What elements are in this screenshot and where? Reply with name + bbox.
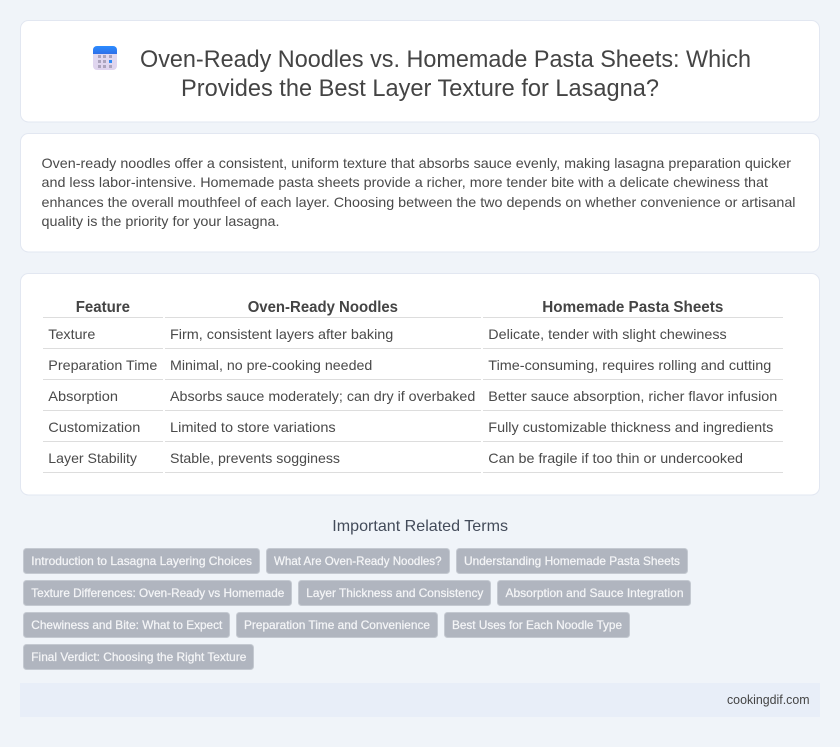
intro text block: Oven-ready noodles offer a consistent, uniform texture that absorbs sauce evenly, making lasagna preparation quicker: [42, 155, 791, 171]
row: texture: [48, 326, 727, 342]
intro text block: [42, 155, 796, 229]
tag: [236, 612, 438, 638]
table header row: Oven-Ready Noodles: [248, 299, 398, 316]
row: absorption: [48, 388, 777, 404]
row: absorption: Absorbs sauce moderately; can dry if overbaked: [170, 388, 475, 404]
footer bar: cookingdif.com: [727, 693, 810, 707]
tag: Preparation Time and Convenience: [244, 618, 430, 632]
table header row: Homemade Pasta Sheets: [542, 299, 723, 316]
intro text block: and less labor-intensive. Homemade pasta sheets provide a richer, more tender bite with a delicate chewiness that: [42, 174, 768, 190]
heading: important related terms: Important Related Terms: [332, 518, 508, 535]
row: layer stability: [48, 450, 743, 466]
row: texture: Delicate, tender with slight chewiness: [488, 326, 727, 342]
row: customization: Customization: [48, 419, 140, 435]
tag: Best Uses for Each Noodle Type: [452, 618, 622, 632]
row: preparation time: [48, 357, 771, 373]
panel: introduction: [20, 134, 820, 252]
footer bar: [20, 683, 820, 717]
title: Provides the Best Layer Texture for Lasagna?: [181, 75, 659, 102]
tag: Chewiness and Bite: What to Expect: [31, 618, 223, 632]
tag: [24, 548, 260, 574]
title: Oven-Ready Noodles vs. Homemade Pasta Sheets: Which: [140, 46, 751, 73]
tag: [24, 644, 254, 670]
row: customization: [48, 419, 773, 435]
row: absorption: Better sauce absorption, richer flavor infusion: [488, 388, 777, 404]
title: [140, 46, 751, 102]
row: layer stability: Stable, prevents sogginess: [170, 450, 340, 466]
row: customization: Fully customizable thickness and ingredients: [488, 419, 773, 435]
intro text block: enhances the overall mouthfeel of each layer. Choosing between the two depends on whether convenience or artisanal: [42, 194, 796, 210]
row: customization: Limited to store variations: [170, 419, 336, 435]
tag: [24, 580, 292, 606]
panel: header: [20, 20, 820, 122]
tag cloud: [24, 548, 690, 670]
table header row: Feature: [76, 299, 130, 316]
row: preparation time: Minimal, no pre-cooking needed: [170, 357, 372, 373]
tag: [498, 580, 690, 606]
row: preparation time: Preparation Time: [48, 357, 158, 373]
row: layer stability: Layer Stability: [48, 450, 137, 466]
tag: [24, 612, 230, 638]
icon: calendar: [93, 46, 117, 70]
tag: Absorption and Sauce Integration: [506, 586, 684, 600]
tag: Understanding Homemade Pasta Sheets: [464, 554, 680, 568]
row: texture: Firm, consistent layers after baking: [170, 326, 393, 342]
row: preparation time: Time-consuming, requires rolling and cutting: [488, 357, 771, 373]
tag: [298, 580, 490, 606]
tag: What Are Oven-Ready Noodles?: [274, 554, 442, 568]
intro text block: quality is the priority for your lasagna.: [42, 213, 280, 229]
row: absorption: Absorption: [48, 388, 118, 404]
tag: [444, 612, 630, 638]
tag: Layer Thickness and Consistency: [306, 586, 483, 600]
table header row: [76, 299, 723, 316]
row: texture: Texture: [48, 326, 96, 342]
tag: [456, 548, 688, 574]
panel: comparison table: [20, 274, 820, 495]
row: layer stability: Can be fragile if too thin or undercooked: [488, 450, 743, 466]
tag: [266, 548, 450, 574]
tag: Final Verdict: Choosing the Right Texture: [31, 650, 247, 664]
tag: Texture Differences: Oven-Ready vs Homemade: [31, 586, 285, 600]
tag: Introduction to Lasagna Layering Choices: [31, 554, 252, 568]
